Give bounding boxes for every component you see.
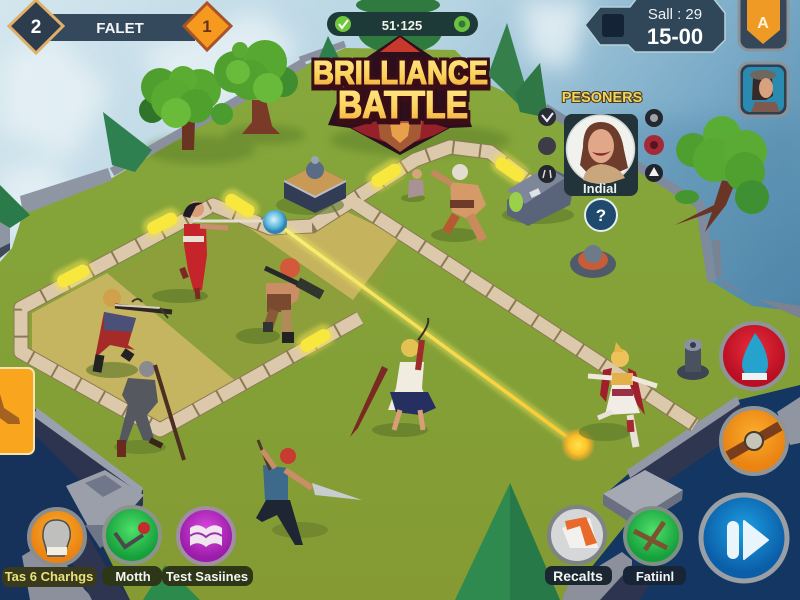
match timer panel xyxy=(585,0,725,52)
character: crossbow fighter xyxy=(86,289,172,378)
sand patch left xyxy=(32,273,238,425)
glowing path markers xyxy=(49,149,533,360)
tower base xyxy=(276,156,346,215)
player rank diamond xyxy=(9,0,63,53)
title logo: BRILLIANCE xyxy=(313,54,488,91)
player card: Indial xyxy=(583,181,617,196)
label: test sessions: Test Sasiines xyxy=(166,569,248,584)
player score bar xyxy=(9,0,231,53)
button: recalls xyxy=(549,507,605,563)
stone post xyxy=(677,339,709,380)
opponent rank diamond xyxy=(184,3,231,50)
label: recalls xyxy=(545,566,612,585)
beam impact glow xyxy=(561,428,595,462)
bunker cannon xyxy=(502,167,575,226)
title logo: BATTLE xyxy=(338,84,468,127)
match timer panel: 15-00 xyxy=(647,24,703,49)
forest behind title xyxy=(356,0,442,54)
character: woman in red xyxy=(152,201,262,303)
label: month: Motth xyxy=(115,569,151,584)
button: test sessions xyxy=(178,508,234,564)
character: warrior with sword xyxy=(350,318,436,437)
character: grey staff man xyxy=(114,361,184,460)
energy orb xyxy=(263,210,287,234)
resource counter: 51·125 xyxy=(382,18,422,33)
avatar button xyxy=(739,63,788,116)
player rank diamond: 2 xyxy=(31,17,41,38)
label: charges: Tas 6 Charhgs xyxy=(5,569,93,584)
title logo xyxy=(313,35,488,155)
character: small distant figure xyxy=(401,169,425,202)
player card xyxy=(564,114,638,196)
enclosed inner lawn xyxy=(30,205,400,430)
grass shadows xyxy=(145,124,510,164)
character: bandana axeman xyxy=(256,440,362,545)
character: blonde heroine xyxy=(579,342,657,447)
left side tab xyxy=(0,368,34,454)
rank badge button: A xyxy=(757,15,769,32)
rank badge button xyxy=(739,0,788,50)
tree: middle xyxy=(214,40,298,134)
resource counter xyxy=(327,12,478,36)
label: month xyxy=(102,566,162,586)
button: crossed tools xyxy=(625,508,681,564)
small turret xyxy=(570,245,616,278)
deep water bottom left xyxy=(0,405,150,600)
label: crossed tools xyxy=(623,566,686,585)
match timer panel: Sall : 29 xyxy=(648,6,702,23)
player score bar: FALET xyxy=(96,20,144,37)
button: month xyxy=(104,507,160,563)
button: gear ability xyxy=(721,408,787,474)
character: red hat gunner xyxy=(236,258,322,344)
sand patch right xyxy=(245,210,400,300)
label: crossed tools: Fatiinl xyxy=(636,569,674,584)
energy beam xyxy=(275,222,578,445)
deep water bottom right xyxy=(560,380,800,600)
stone path xyxy=(21,147,695,430)
button: drop ability xyxy=(721,323,787,389)
label: test sessions xyxy=(162,566,253,586)
character: old brawler xyxy=(431,164,486,242)
label: charges xyxy=(2,567,97,587)
pine trees xyxy=(0,23,560,600)
player portrait xyxy=(580,122,628,183)
players panel heading: PESONERS xyxy=(562,90,643,106)
help button xyxy=(585,199,617,231)
button: charges xyxy=(29,509,85,565)
player status icons xyxy=(538,108,664,183)
tree: left xyxy=(139,66,233,150)
button: play xyxy=(701,495,787,581)
tree: right xyxy=(675,116,769,232)
label: recalls: Recalts xyxy=(553,568,603,584)
help button: ? xyxy=(596,206,606,225)
opponent rank diamond: 1 xyxy=(202,17,212,36)
